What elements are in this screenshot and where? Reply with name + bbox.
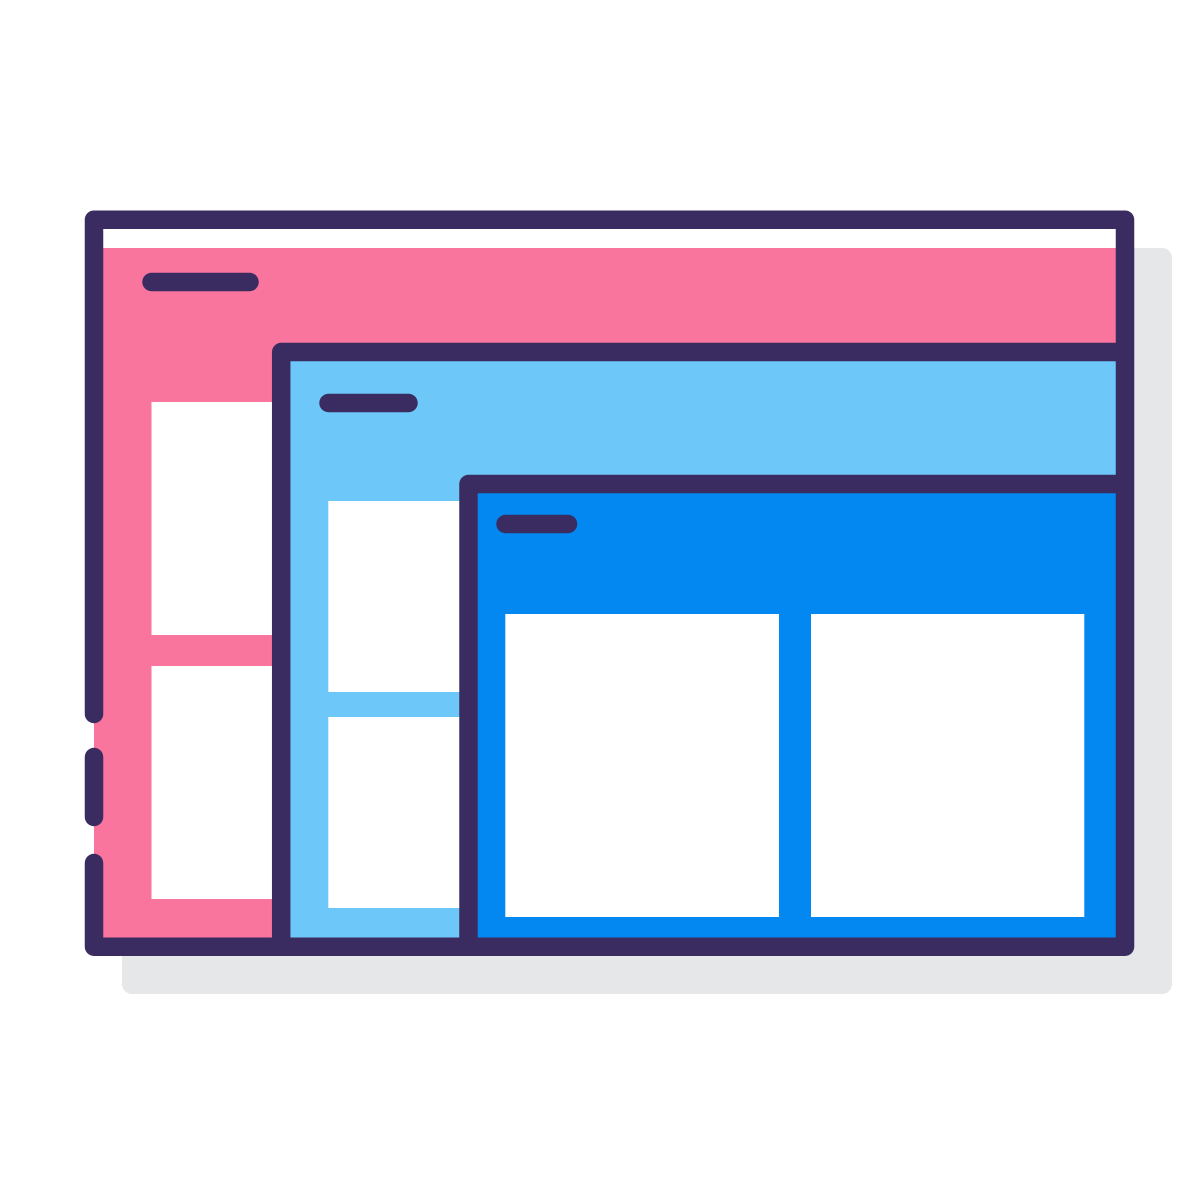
drop shadow [122,248,1172,994]
window: small blue [468,484,1125,947]
window: medium light blue [281,352,1125,947]
window: large pink [94,220,1125,947]
outlines of the windows [94,220,1125,947]
